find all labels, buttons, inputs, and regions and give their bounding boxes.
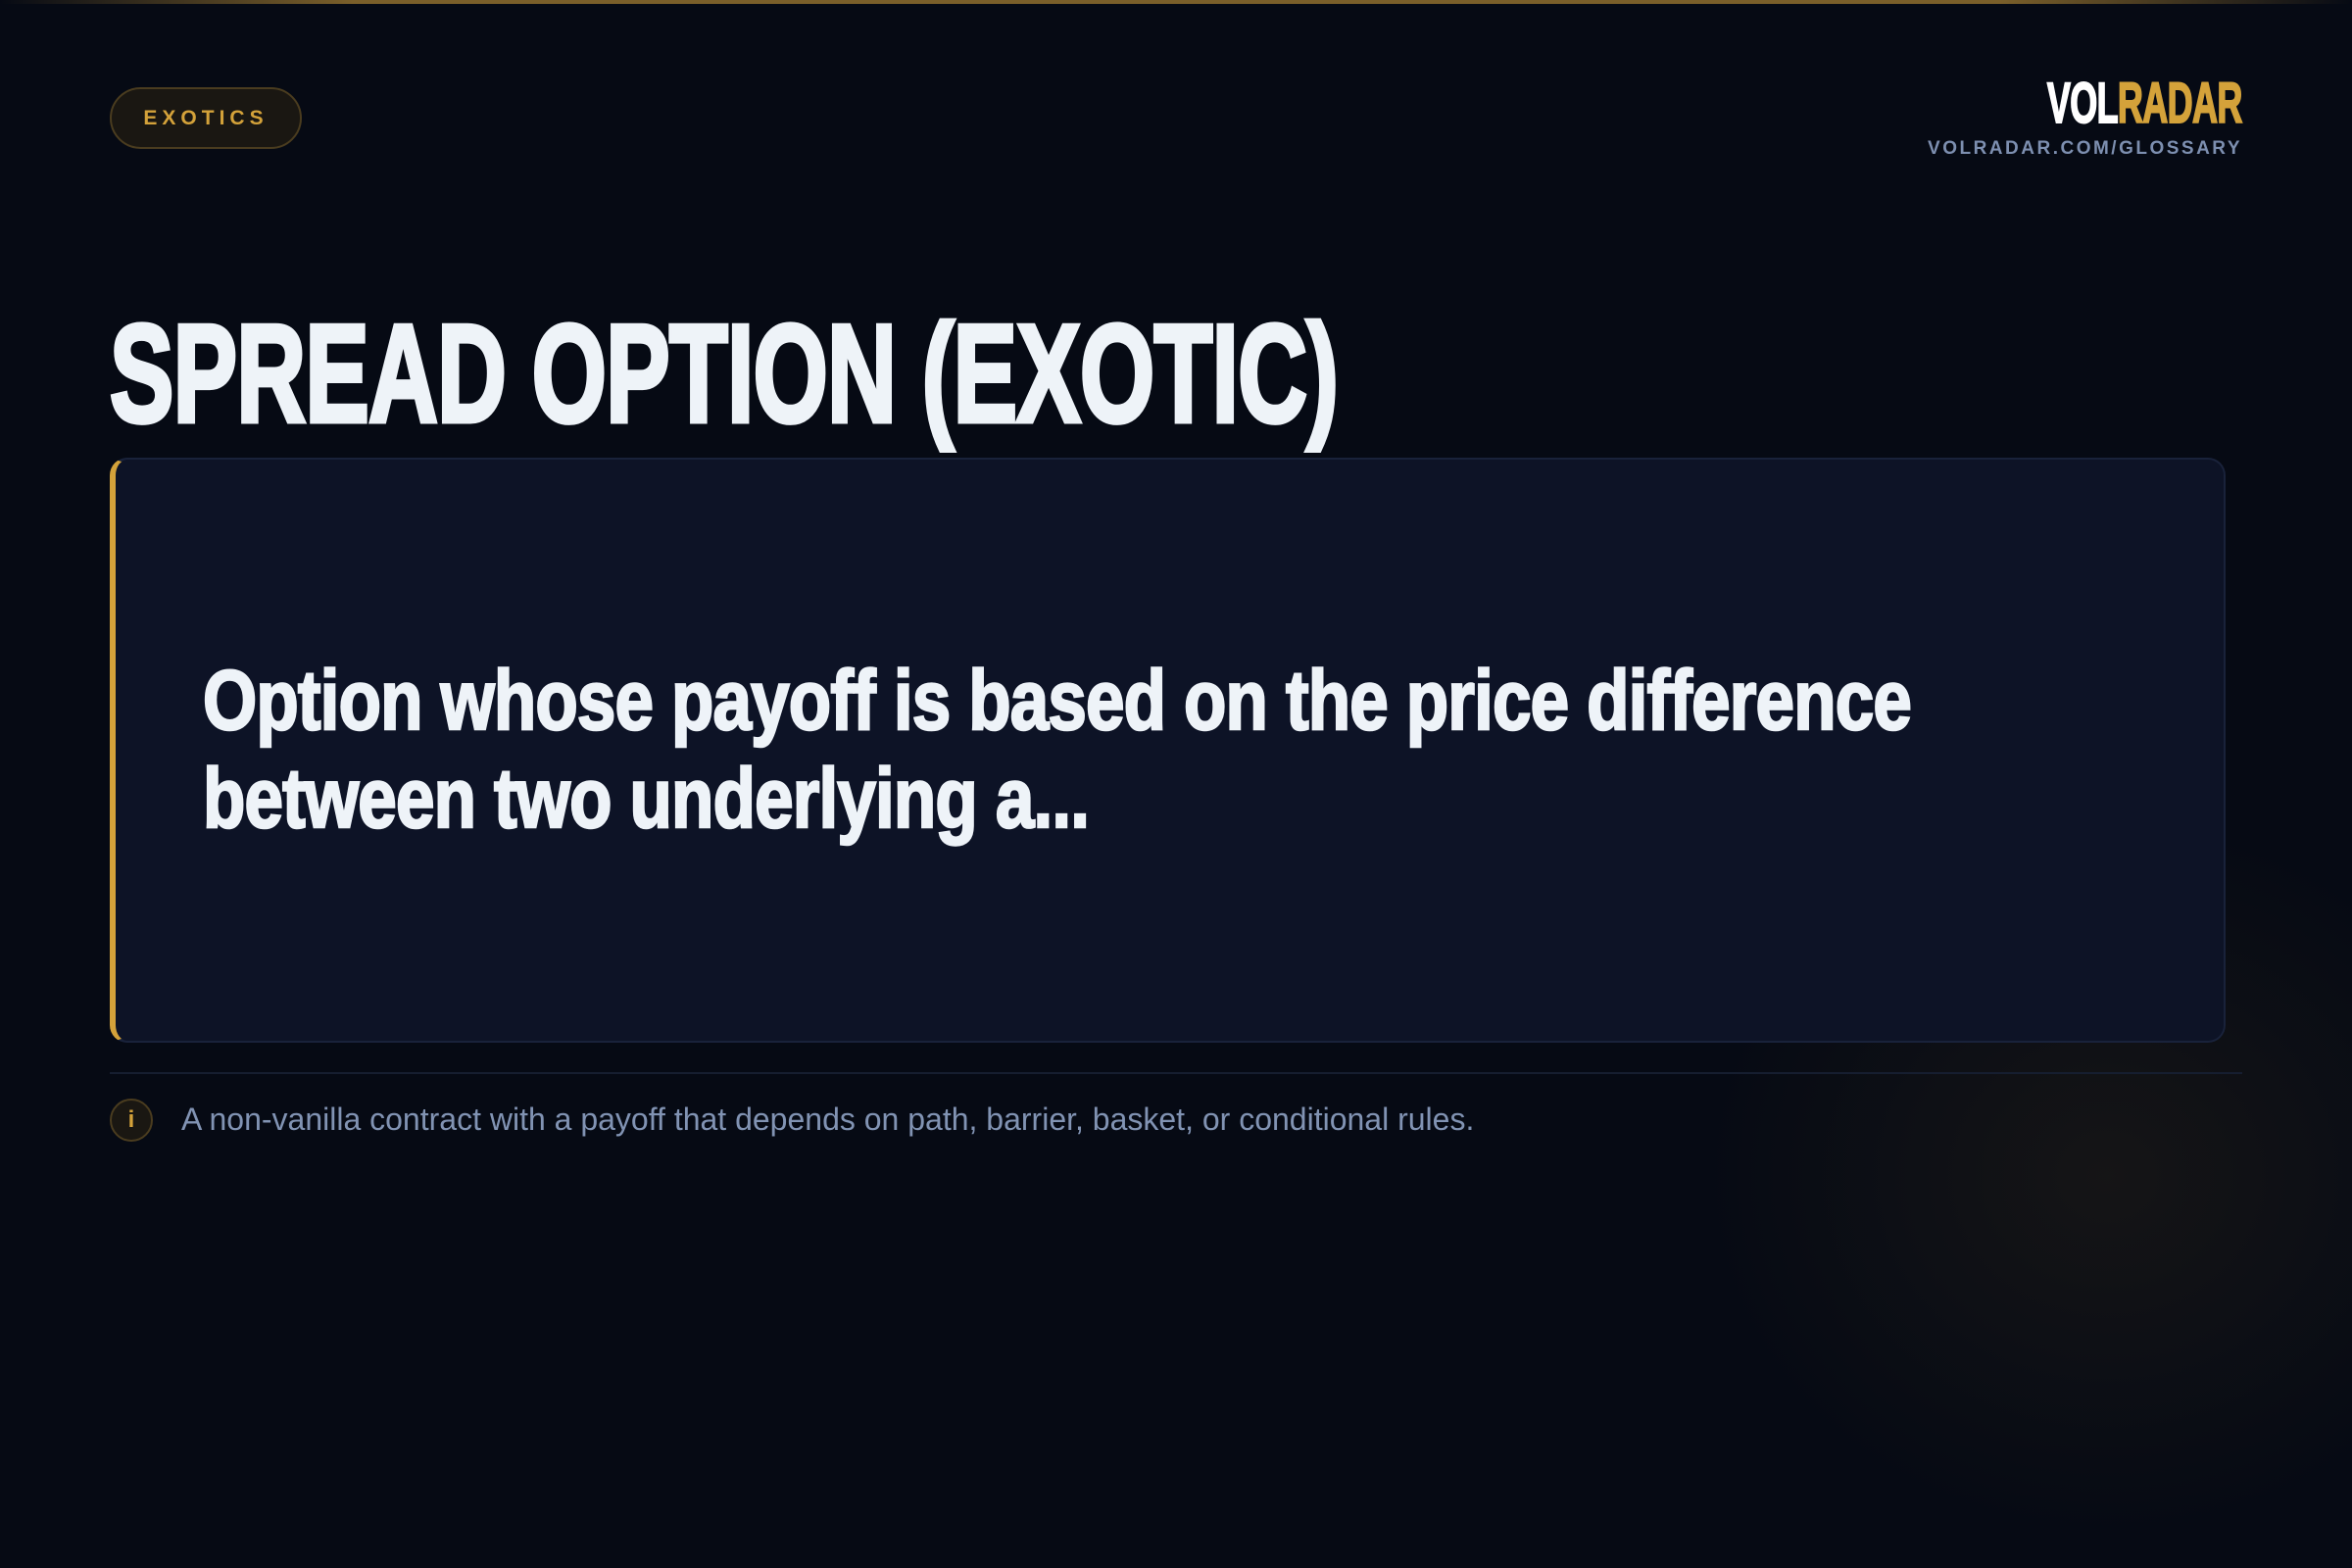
url: VOLRADAR.COM/GLOSSARY [1928,138,2242,159]
definition text [203,654,1911,847]
definition text: between two underlying a... [203,752,1089,846]
icon: info [110,1099,153,1142]
logo: VOLRADAR [2047,72,2242,135]
footnote text: A non-vanilla contract with a payoff that depends on path, barrier, basket, or conditional rules. [181,1102,1474,1137]
icon: info: i [128,1106,134,1133]
definition text: Option whose payoff is based on the price difference [203,654,1911,748]
category pill: EXOTICS [143,106,269,129]
category pill [110,87,302,149]
panel: definition card [110,458,2226,1043]
title: SPREAD OPTION (EXOTIC) [110,296,1338,452]
